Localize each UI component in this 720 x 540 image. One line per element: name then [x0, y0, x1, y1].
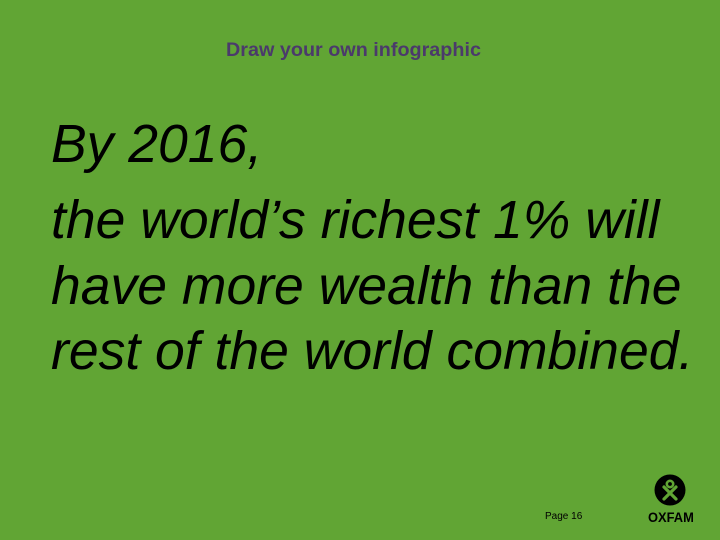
icon: oxfam symbol — [654, 474, 686, 506]
logo text: OXFAM — [648, 509, 694, 525]
line 2: the world’s richest 1% will — [51, 191, 660, 250]
title: Draw your own infographic — [226, 39, 481, 61]
logo: oxfam — [648, 474, 694, 525]
line 1: By 2016, — [51, 115, 262, 174]
line 4: rest of the world combined. — [51, 322, 693, 381]
page number: Page 16 — [545, 511, 582, 522]
main statement — [51, 115, 693, 381]
line 3: have more wealth than the — [51, 257, 682, 316]
